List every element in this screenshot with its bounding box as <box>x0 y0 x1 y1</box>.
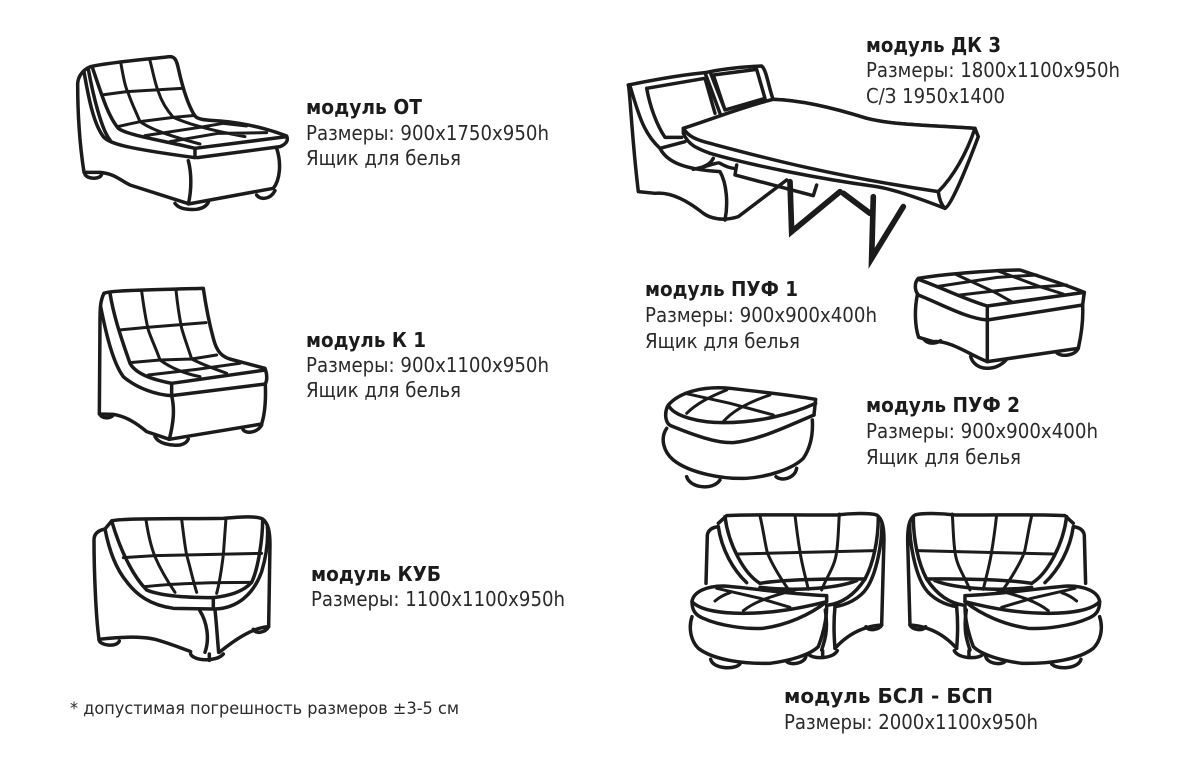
text: module K1: Ящик для белья <box>306 378 461 402</box>
text: module DK3 <box>866 33 1120 108</box>
text: module BSL-BSP: Размеры: 2000x1100x950h <box>784 710 1038 734</box>
text: module PUF2: Размеры: 900x900x400h <box>866 419 1098 443</box>
text: module K1: модуль К 1 <box>306 328 426 352</box>
text: module PUF2: модуль ПУФ 2 <box>866 393 1020 417</box>
text: module OT <box>306 95 549 170</box>
text: module OT: Размеры: 900x1750x950h <box>306 121 549 145</box>
text: module OT: модуль ОТ <box>306 95 422 119</box>
icon: module PUF2 round pouf <box>663 388 816 487</box>
text: module BSL-BSP: модуль БСЛ - БСП <box>784 684 993 708</box>
icon: module BSL left corner sofa <box>690 513 884 668</box>
text: module KUB: Размеры: 1100x1100x950h <box>311 587 565 611</box>
icon: module KUB corner <box>94 517 270 660</box>
text: module DK3: Размеры: 1800x1100x950h <box>866 58 1120 82</box>
text: module PUF1: Ящик для белья <box>645 329 800 353</box>
text: module KUB <box>311 562 565 611</box>
text: module PUF1: Размеры: 900x900x400h <box>645 303 877 327</box>
text: module OT: Ящик для белья <box>306 146 461 170</box>
text: module DK3: модуль ДК 3 <box>866 33 1001 57</box>
text: module BSL-BSP <box>784 684 1038 734</box>
icon: module K1 chair <box>99 288 267 445</box>
text: module PUF2 <box>866 393 1098 469</box>
icon: module OT chaise <box>78 57 287 209</box>
text: module K1: Размеры: 900x1100x950h <box>306 353 549 377</box>
text: module KUB: модуль КУБ <box>311 562 441 586</box>
footnote: * допустимая погрешность размеров ±3-5 см <box>70 699 459 718</box>
icon: module DK3 sofa bed <box>628 66 978 258</box>
text: module DK3: С/З 1950x1400 <box>866 84 1005 108</box>
text: module PUF1: модуль ПУФ 1 <box>645 277 798 301</box>
icon: module BSP right corner sofa <box>908 513 1101 668</box>
text: module PUF1 <box>645 277 877 353</box>
text: module K1 <box>306 328 549 402</box>
icon: module PUF1 square pouf <box>915 270 1084 368</box>
text: module PUF2: Ящик для белья <box>866 445 1021 469</box>
